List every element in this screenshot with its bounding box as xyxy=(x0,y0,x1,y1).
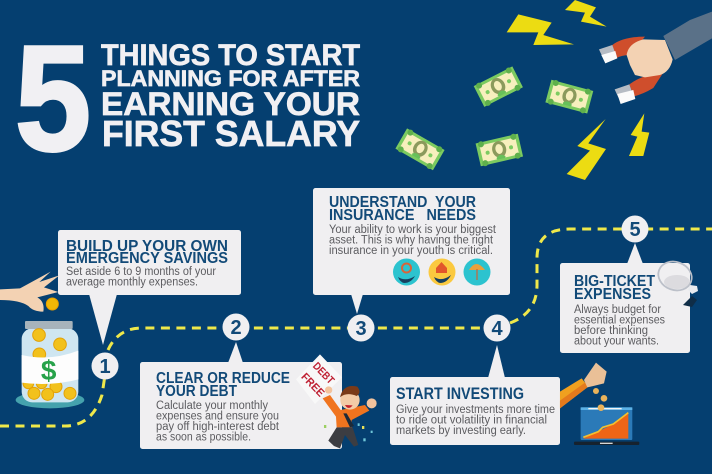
heading 2 xyxy=(156,370,290,400)
body text 3: Your ability to work is your biggest xyxy=(329,224,497,236)
panel 4: investing xyxy=(390,345,560,445)
step number 3 xyxy=(348,314,374,342)
heading 1: BUILD UP YOUR OWN xyxy=(66,238,228,255)
title: THINGS TO START xyxy=(101,39,360,72)
body text 5: about your wants. xyxy=(574,336,659,348)
title: FIRST SALARY xyxy=(102,113,360,154)
heading 2: YOUR DEBT xyxy=(156,383,237,400)
icon: hand holding magnet xyxy=(599,12,712,104)
icon: ring xyxy=(654,257,698,307)
icon: arm dropping coins xyxy=(560,363,607,408)
icon: umbrella xyxy=(464,258,490,286)
icon: jumping man xyxy=(323,386,377,448)
body text 2: pay off high-interest debt xyxy=(156,421,280,433)
step number 2 xyxy=(222,314,250,340)
step number 4: 4 xyxy=(491,318,503,340)
title: PLANNING FOR AFTER xyxy=(101,66,360,91)
title xyxy=(15,14,360,182)
illustration: debt free person xyxy=(296,354,377,448)
body text 2: expenses and ensure you xyxy=(156,410,279,422)
icon: life insurance xyxy=(393,258,420,286)
body text 5 xyxy=(574,304,665,348)
body text 2: as soon as possible. xyxy=(156,432,251,444)
icon: laptop with growth chart xyxy=(574,404,639,445)
heading 2: CLEAR OR REDUCE xyxy=(156,370,290,387)
step number 1: 1 xyxy=(99,356,111,378)
icon: home insurance xyxy=(428,258,456,286)
panel 3: insurance xyxy=(313,188,510,314)
body text 5: essential expenses xyxy=(574,314,665,326)
body text 5: before thinking xyxy=(574,325,648,337)
icon: debt free sign xyxy=(296,354,342,404)
body text 1: average monthly expenses. xyxy=(66,276,198,288)
step number 5: 5 xyxy=(629,219,641,241)
step number 2: 2 xyxy=(230,317,242,339)
body text 2: Calculate your monthly xyxy=(156,400,268,412)
panel 1: emergency savings xyxy=(58,230,241,345)
title: 5 xyxy=(15,14,91,182)
panel 2: debt xyxy=(140,342,342,449)
icon: debt free sign: DEBT xyxy=(310,360,336,387)
heading 4: START INVESTING xyxy=(396,385,524,403)
icon: lightning bolts xyxy=(507,0,649,180)
title: EARNING YOUR xyxy=(101,86,360,122)
icon: jar: $ xyxy=(41,355,57,386)
icon: debt free sign: FREE xyxy=(298,371,327,399)
icon: banknotes xyxy=(395,66,594,171)
body text 1: Set aside 6 to 9 months of your xyxy=(66,266,216,278)
illustration: savings jar and hand xyxy=(0,272,84,408)
body text 3: insurance in your youth is critical. xyxy=(329,245,493,257)
panel 5: big-ticket expenses xyxy=(560,243,690,353)
heading 5: BIG-TICKET xyxy=(574,273,655,290)
body text 1 xyxy=(66,266,216,288)
step number 1 xyxy=(92,352,118,380)
step number 3: 3 xyxy=(355,318,367,340)
heading 3: INSURANCE NEEDS xyxy=(329,207,476,224)
step number 4 xyxy=(484,314,510,342)
heading 3: UNDERSTAND YOUR xyxy=(329,194,476,211)
heading 1: EMERGENCY SAVINGS xyxy=(66,250,228,267)
body text 4: Give your investments more time xyxy=(396,404,555,416)
dashed path xyxy=(0,229,712,426)
heading 1 xyxy=(66,238,228,267)
body text 2 xyxy=(156,400,280,444)
step number 5 xyxy=(622,216,648,242)
body text 3 xyxy=(329,224,497,257)
icon: hand with coin xyxy=(0,272,59,312)
heading 5: EXPENSES xyxy=(574,286,651,303)
body text 5: Always budget for xyxy=(574,304,661,316)
body text 3: asset. This is why having the right xyxy=(329,234,494,246)
heading 5 xyxy=(574,273,655,303)
body text 4 xyxy=(396,404,555,437)
illustration: magnet attracting money xyxy=(395,0,712,180)
body text 4: to ride out volatility in financial xyxy=(396,414,547,426)
heading 3 xyxy=(329,194,476,224)
illustration: investing hand and laptop xyxy=(560,363,639,445)
body text 4: markets by investing early. xyxy=(396,425,526,437)
